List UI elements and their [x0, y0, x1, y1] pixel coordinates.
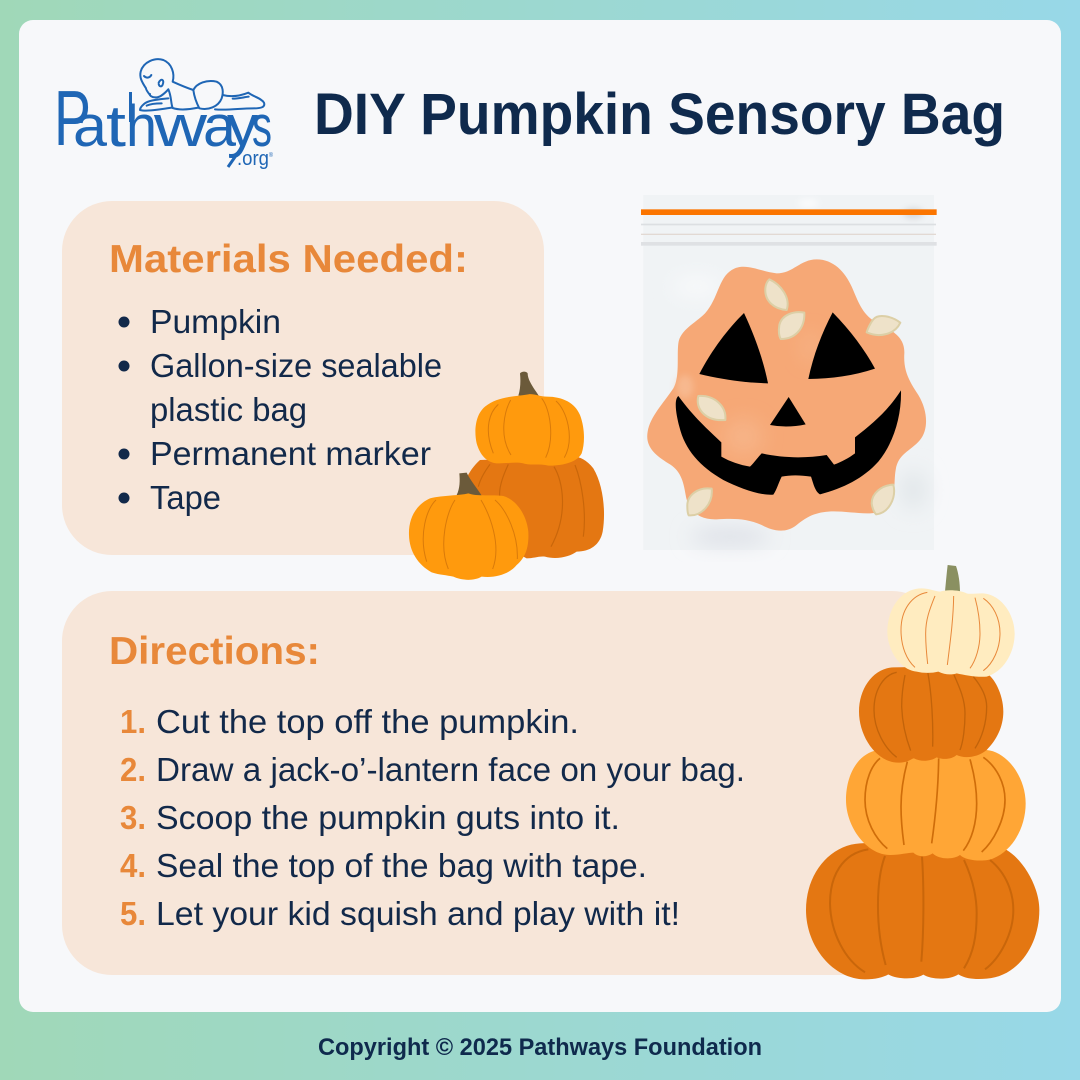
icon: two stacked pumpkins and one beside: [409, 372, 604, 580]
zip seal lines: [641, 209, 937, 246]
icon: stack of four pumpkins: [806, 565, 1039, 979]
back large pumpkin: [461, 457, 604, 558]
materials list: Permanent marker: [150, 435, 431, 472]
step 2: 2.: [120, 751, 146, 788]
step 2: Draw a jack-o’-lantern face on your bag.: [156, 751, 745, 788]
logo .org: .org: [237, 148, 271, 170]
panel: directions: [62, 591, 942, 975]
bottom pumpkin: [806, 840, 1039, 979]
panel background: [62, 591, 942, 975]
logo .org: ®: [269, 152, 274, 159]
logo wordmark: t: [106, 94, 126, 159]
icon: sealable bag with jack-o-lantern: [641, 195, 937, 550]
materials list: Pumpkin: [150, 303, 281, 340]
logo wordmark: h: [126, 94, 157, 159]
step 3: Scoop the pumpkin guts into it.: [156, 799, 620, 836]
title: DIY Pumpkin Sensory Bag: [314, 82, 1005, 147]
directions heading: Directions:: [109, 630, 320, 673]
panel: materials: [62, 201, 544, 555]
logo wordmark: s: [252, 94, 272, 159]
front pumpkin: [409, 473, 528, 580]
blob highlights: [677, 332, 818, 455]
step 5: 5.: [120, 895, 146, 932]
top cream pumpkin: [887, 565, 1015, 677]
icon: baby line drawing: [140, 59, 264, 111]
second pumpkin: [846, 743, 1026, 861]
logo: Pathways.org: [54, 59, 274, 170]
left eye: [699, 313, 768, 383]
panel background: [62, 201, 544, 555]
mouth: [676, 390, 901, 495]
logo wordmark: a: [73, 94, 108, 159]
materials heading: Materials Needed:: [109, 238, 468, 281]
materials list: [118, 303, 442, 516]
top pumpkin: [475, 372, 584, 466]
bag body: [643, 195, 934, 550]
logo wordmark: y: [227, 94, 258, 159]
bag shading: [673, 199, 927, 545]
step 1: 1.: [120, 703, 146, 740]
pumpkin seeds: [687, 279, 900, 515]
copyright footer: Copyright © 2025 Pathways Foundation: [318, 1034, 762, 1061]
pumpkin guts blob: [647, 259, 926, 531]
step 3: 3.: [120, 799, 146, 836]
step 5: Let your kid squish and play with it!: [156, 895, 680, 932]
right eye: [808, 312, 875, 379]
logo wordmark: w: [153, 94, 208, 159]
materials list: Tape: [150, 479, 221, 516]
nose: [770, 397, 806, 427]
materials list: Gallon-size sealable: [150, 347, 442, 384]
logo wordmark: P: [54, 74, 91, 162]
step 4: Seal the top of the bag with tape.: [156, 847, 647, 884]
third pumpkin: [859, 667, 1003, 763]
materials list: plastic bag: [150, 391, 307, 428]
step 4: 4.: [120, 847, 146, 884]
logo wordmark: [54, 74, 272, 167]
logo wordmark: a: [203, 94, 237, 159]
step 1: Cut the top off the pumpkin.: [156, 703, 579, 740]
